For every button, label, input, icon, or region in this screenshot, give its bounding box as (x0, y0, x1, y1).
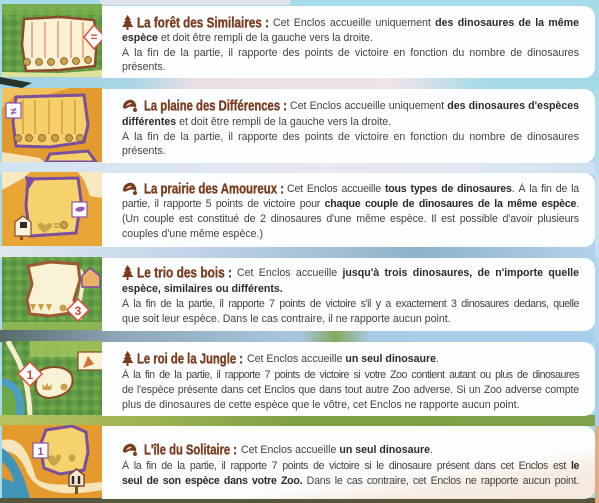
panel: La forêt des Similaires: espèce et doit être rempli de la gauche vers la droite. (122, 32, 373, 44)
heading with tree icon (122, 350, 243, 368)
text block: Cet Enclos accueille jusqu'à trois dinosaures, de n'importe quelle (237, 267, 579, 279)
panel: L'île du Solitaire: seul de son espèce dans votre Zoo. Dans le cas contraire, cet Enclos ne rapporte aucun point. (122, 475, 579, 487)
thumbnail: island enclosure (2, 425, 102, 498)
heading with rock icon (123, 98, 287, 114)
panel: L'île du Solitaire (2, 425, 595, 499)
heading with tree icon: La forêt des Similaires : (137, 14, 269, 32)
panel: La prairie des Amoureux: partie, il rapporte 5 points de victoire pour chaque couple de dinosaures de la même espèce. (122, 198, 579, 210)
heading with rock icon (123, 442, 237, 458)
thumbnail: meadow enclosure (2, 172, 102, 246)
panel background (102, 173, 595, 247)
panel background (102, 258, 595, 331)
panel: Le trio des bois (2, 257, 595, 331)
thumbnail: jungle enclosure: 1 (27, 368, 34, 382)
panel: Le roi de la Jungle: plus de dinosaures de cette espèce que le vôtre, cet Enclos ne rapporte aucun point. (122, 399, 520, 411)
panel: Le roi de la Jungle (2, 341, 595, 416)
text block: Cet Enclos accueille uniquement des dinosaures de la même (273, 17, 579, 29)
panel: La plaine des Différences: différentes et doit être rempli de la gauche vers la droite. (122, 116, 391, 128)
heading with tree icon: Le trio des bois : (137, 264, 232, 282)
panel: La forêt des Similaires: présents. (122, 61, 166, 73)
panel: Le roi de la Jungle: À la fin de la partie, il rapporte 7 points de victoire si votre Zoo contient autant ou plus de dinosaures (122, 369, 579, 381)
text block: Cet Enclos accueille un seul dinosaure. (241, 444, 433, 456)
thumbnail: plain enclosure: ≠ (10, 106, 17, 118)
thumbnail: forest enclosure: = (90, 30, 98, 44)
panel: La prairie des Amoureux (2, 172, 595, 247)
text block: Cet Enclos accueille un seul dinosaure. (247, 353, 439, 365)
panel: La forêt des Similaires (2, 4, 595, 78)
panel: Le roi de la Jungle: de l'espèce présente dans cet Enclos que dans tout autre Zoo adverse. Si un Zoo adverse compte (122, 384, 579, 396)
heading with rock icon (123, 180, 284, 198)
panel background (102, 89, 595, 163)
heading with tree icon: Le roi de la Jungle : (137, 350, 243, 368)
heading with rock icon: La plaine des Différences : (144, 98, 287, 114)
panel: La plaine des Différences: présents. (122, 145, 166, 157)
panel background (102, 426, 595, 499)
text block: Cet Enclos accueille tous types de dinosaures. À la fin de la (287, 183, 579, 195)
panel: Le trio des bois: À la fin de la partie, il rapporte 7 points de victoire s'il y a exactement 3 dinosaures dedans, quelle (122, 298, 579, 310)
panel: Le trio des bois: espèce, similaires ou différents. (122, 283, 283, 295)
thumbnail: plain enclosure (2, 88, 102, 162)
panel: La prairie des Amoureux: (Un couple est constitué de 2 dinosaures d'une même espèce. Il est possible d'avoir plusieurs (122, 213, 579, 225)
panel background (102, 6, 595, 78)
panel: La plaine des Différences: À la fin de la partie, il rapporte des points de victoire en fonction du nombre de dinosaures (122, 131, 579, 143)
thumbnail: forest enclosure (2, 4, 102, 77)
thumbnail: jungle enclosure (2, 341, 102, 415)
panel: La forêt des Similaires: À la fin de la partie, il rapporte des points de victoire en fonction du nombre de dinosaures (122, 47, 579, 59)
panel: Le trio des bois: que soit leur espèce. Dans le cas contraire, il ne rapporte aucun point. (122, 313, 451, 325)
panel: La prairie des Amoureux: couples d'une même espèce.) (122, 228, 263, 240)
panel: La plaine des Différences (2, 88, 595, 163)
panel background (102, 342, 595, 416)
heading with rock icon: La prairie des Amoureux : (144, 180, 284, 198)
thumbnail: woods enclosure: 3 (75, 304, 82, 318)
heading with rock icon: L'île du Solitaire : (144, 442, 237, 458)
thumbnail: woods enclosure (2, 257, 102, 330)
thumbnail: island enclosure: 1 (37, 446, 44, 458)
text block: Cet Enclos accueille uniquement des dinosaures d'espèces (290, 100, 579, 112)
panel: L'île du Solitaire: À la fin de la partie, il rapporte 7 points de victoire si le dinosaure présent dans cet Enclos est le (122, 460, 579, 472)
